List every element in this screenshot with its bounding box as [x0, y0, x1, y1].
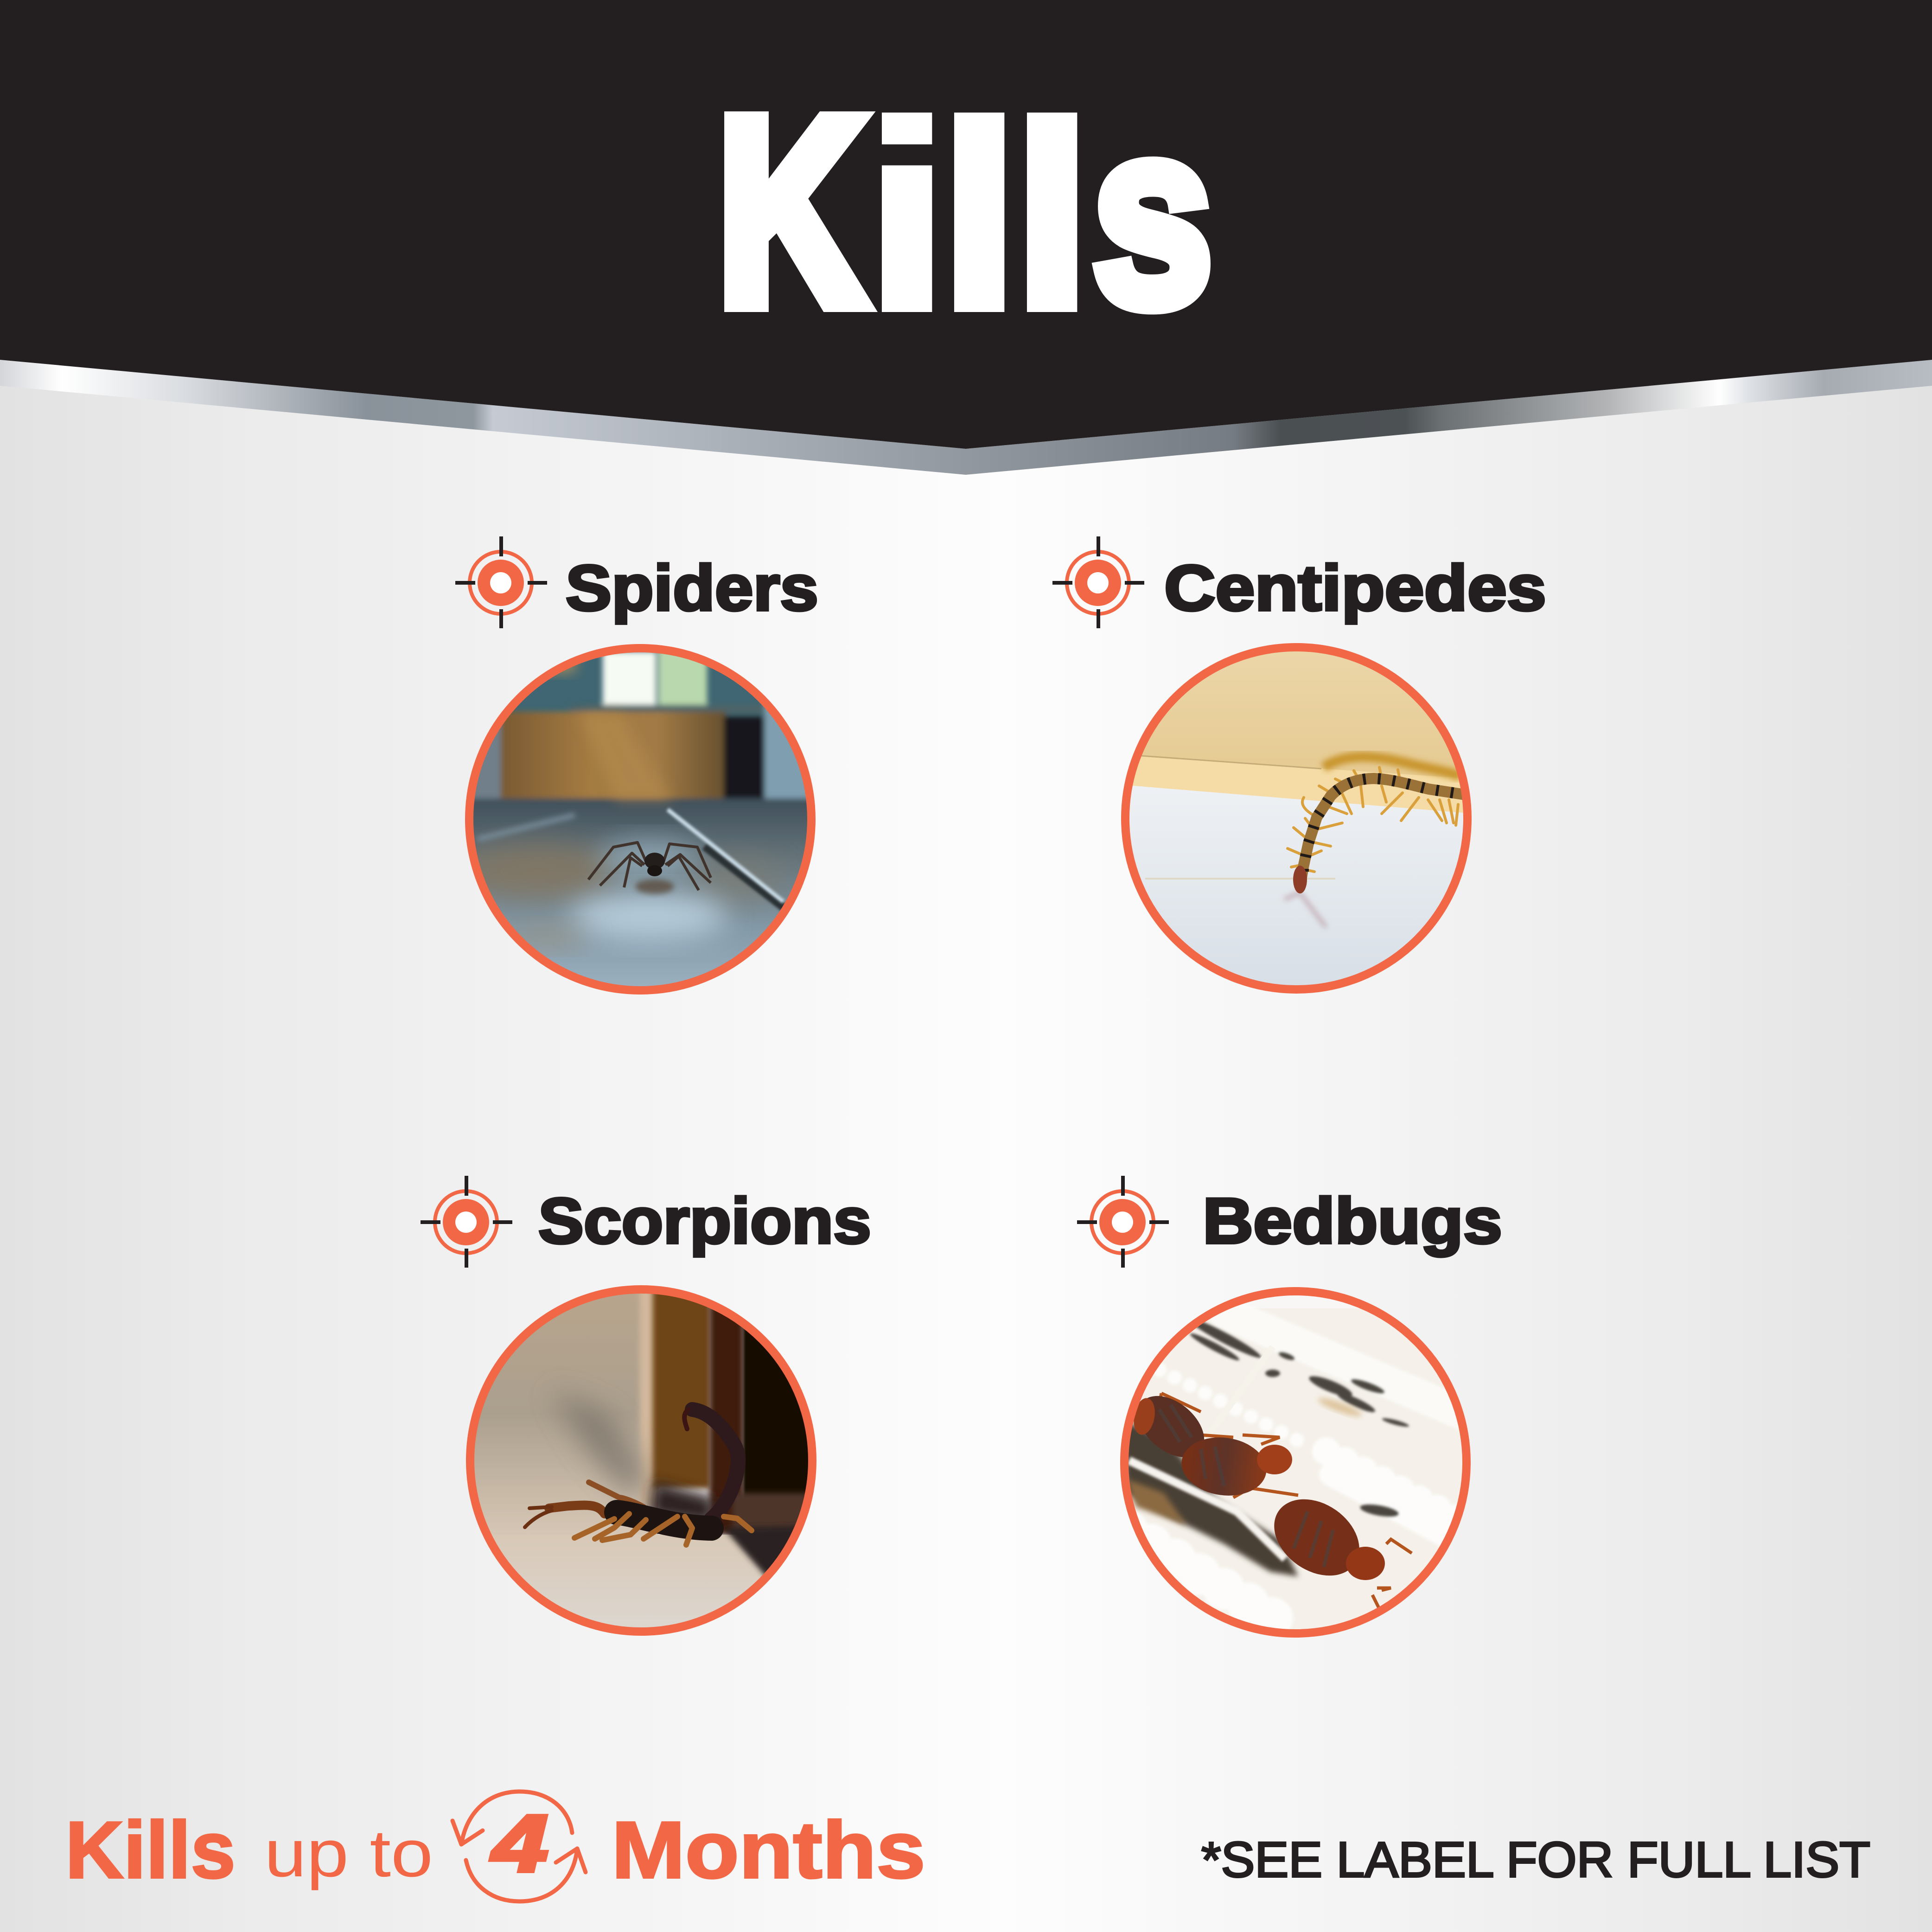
panel: scorpions — [421, 1176, 871, 1637]
icon: target — [1052, 536, 1144, 628]
title: l — [934, 66, 1025, 367]
icon: target — [421, 1176, 512, 1268]
panel: bedbugs — [1077, 1176, 1502, 1642]
number 4: 4 — [491, 1798, 548, 1888]
title: l — [1007, 66, 1097, 367]
ring — [469, 648, 811, 990]
panel: centipedes — [1052, 536, 1546, 1001]
footer claim — [65, 1792, 925, 1901]
footnote: *SEE LABEL FOR FULL LIST — [1201, 1831, 1870, 1887]
text: Months: Months — [612, 1804, 925, 1895]
title: s — [1093, 70, 1212, 358]
title: i — [862, 66, 952, 367]
photo: centipede on ledge — [1129, 651, 1463, 985]
icon: target — [1077, 1176, 1169, 1268]
text: up to: up to — [264, 1816, 433, 1891]
header banner — [0, 0, 1932, 475]
title: K — [719, 65, 863, 357]
ring — [470, 1289, 812, 1632]
photo: scorpion by door — [474, 1294, 808, 1627]
icon: target — [455, 536, 547, 628]
photo: spider on floor — [473, 652, 807, 986]
heading: Scorpions: Scorpions — [538, 1185, 871, 1257]
heading: Bedbugs: Bedbugs — [1203, 1185, 1502, 1257]
text: Kills: Kills — [65, 1804, 236, 1895]
ring — [1124, 1291, 1467, 1633]
ring — [1125, 647, 1467, 989]
heading: Centipedes: Centipedes — [1164, 552, 1546, 624]
panel: spiders — [455, 536, 821, 998]
photo: bedbugs on mattress — [1129, 1308, 1459, 1629]
heading: Spiders: Spiders — [566, 552, 818, 624]
icon: circular arrows with 4 — [453, 1792, 586, 1901]
